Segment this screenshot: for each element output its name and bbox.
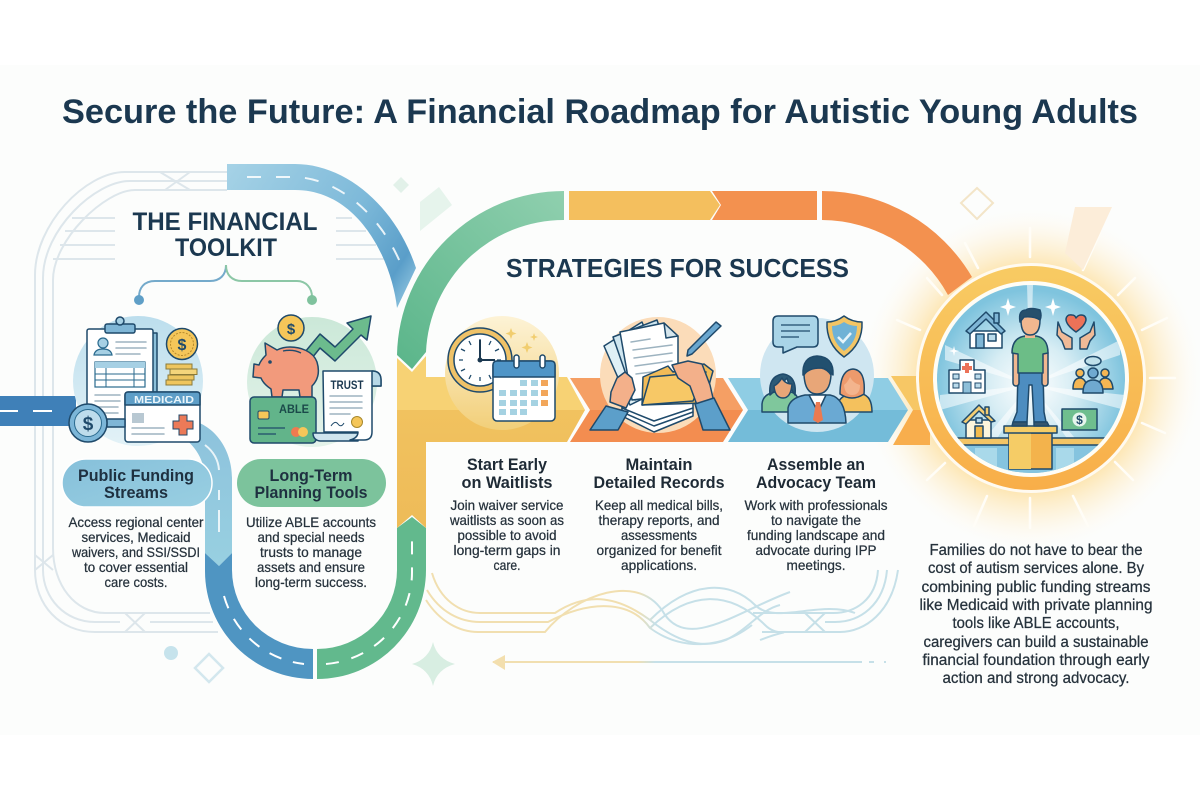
- road: yellow top segment: [569, 191, 720, 220]
- icon: dollar bill: $: [1076, 413, 1083, 427]
- text: public funding streams: to cover essential: [84, 559, 188, 575]
- section heading: the financial toolkit: THE FINANCIAL: [132, 208, 318, 236]
- icon: public funding documents, medicaid card and coins: $: [178, 337, 187, 354]
- icon: piggy bank, ABLE card, trust document, growth arrow: ABLE: [279, 404, 309, 416]
- text: conclusion: cost of autism services alone. By: [928, 560, 1144, 577]
- text: assemble an advocacy team: to navigate the: [771, 512, 861, 528]
- text: start early on waitlists: waitlists as soon as: [449, 512, 564, 528]
- road: light blue descending with arrow: [180, 420, 232, 566]
- sparkles: [949, 298, 1061, 356]
- text: maintain detailed records: therapy reports, and: [598, 512, 720, 528]
- pill: long-term planning tools: [237, 459, 386, 507]
- decorative route lines: woven bottom: [426, 570, 898, 662]
- pill: long-term planning tools: Long-Term: [270, 466, 352, 485]
- text: assemble an advocacy team: [744, 455, 888, 573]
- text: assemble an advocacy team: advocate during IPP: [756, 542, 876, 558]
- road: orange top segment: [712, 191, 817, 220]
- text: conclusion: action and strong advocacy.: [942, 670, 1130, 687]
- icon: community group: [1073, 356, 1113, 393]
- text: conclusion: combining public funding streams: [922, 579, 1151, 596]
- text: start early on waitlists: Start Early: [467, 455, 548, 474]
- text: assemble an advocacy team: Work with professionals: [744, 497, 888, 513]
- pill: public funding streams: Streams: [104, 483, 168, 502]
- pedestal: [1004, 426, 1057, 469]
- text: conclusion: tools like ABLE accounts,: [952, 615, 1120, 632]
- section heading: the financial toolkit: [132, 208, 318, 262]
- text: assemble an advocacy team: Assemble an: [767, 455, 865, 474]
- text: public funding streams: waivers, and SSI/SSDI: [71, 544, 200, 560]
- sun rays: [897, 228, 1175, 528]
- step chevron: orange: [570, 378, 743, 442]
- connector into goal ring: [891, 376, 930, 445]
- text: maintain detailed records: Detailed Records: [594, 473, 724, 492]
- icon: piggy bank, ABLE card, trust document, growth arrow: [247, 315, 381, 447]
- decorative route lines: toolkit frame: [35, 172, 384, 632]
- text: maintain detailed records: Maintain: [626, 455, 692, 474]
- icon: house: [966, 312, 1005, 348]
- pill: public funding streams: Public Funding: [78, 466, 194, 485]
- step chevron: yellow with column: [397, 356, 585, 528]
- text: long-term planning tools: and special needs: [258, 529, 364, 545]
- arrowhead: bottom route: [492, 655, 505, 670]
- bracket connecting toolkit to columns: [134, 265, 317, 305]
- text: start early on waitlists: Join waiver service: [450, 497, 564, 513]
- icon: dollar bill: [1062, 409, 1097, 430]
- road: dark blue U segment: [205, 553, 313, 679]
- text: maintain detailed records: assessments: [621, 527, 697, 543]
- text: start early on waitlists: on Waitlists: [462, 473, 552, 492]
- section heading: the financial toolkit: TOOLKIT: [175, 234, 277, 262]
- text: assemble an advocacy team: meetings.: [786, 557, 846, 573]
- title: Secure the Future: A Financial Roadmap for Autistic Young Adults: [62, 93, 1138, 131]
- road: green arc: [397, 191, 564, 369]
- text: conclusion: caregivers can build a sustainable: [924, 634, 1148, 651]
- text: public funding streams: Access regional center: [68, 514, 204, 530]
- goal ring with person on pedestal: [916, 263, 1146, 493]
- section heading: strategies for success: STRATEGIES FOR SUCCESS: [506, 253, 849, 283]
- text: conclusion: financial foundation through early: [922, 652, 1150, 669]
- icon: medical records and folder with hands: [590, 317, 730, 433]
- icon: public funding documents, medicaid card and coins: $: [83, 414, 94, 435]
- text: start early on waitlists: long-term gaps in: [454, 542, 560, 558]
- icon: clock and calendar: [445, 316, 559, 430]
- icon: piggy bank, ABLE card, trust document, growth arrow: TRUST: [330, 380, 364, 392]
- icon: public funding documents, medicaid card and coins: MEDICAID: [134, 394, 194, 406]
- person standing on pedestal: [1012, 308, 1049, 426]
- text: public funding streams: services, Medicaid: [82, 529, 190, 545]
- text: assemble an advocacy team: Advocacy Team: [756, 473, 876, 492]
- icon: piggy bank, ABLE card, trust document, growth arrow: $: [287, 321, 296, 338]
- road: green U segment with arrow: [317, 517, 426, 679]
- icon: public funding documents, medicaid card and coins: [69, 316, 203, 446]
- road: entry from left: [0, 396, 76, 426]
- text: long-term planning tools: [246, 514, 376, 590]
- road: orange arc into goal: [822, 191, 972, 295]
- text: long-term planning tools: Utilize ABLE accounts: [246, 514, 376, 530]
- text: public funding streams: [68, 514, 204, 590]
- text: long-term planning tools: long-term success.: [255, 574, 367, 590]
- sun glow: [856, 204, 1200, 554]
- text: conclusion: Families do not have to bear the: [930, 542, 1142, 559]
- icon: heart in hands: [1057, 315, 1095, 349]
- text: long-term planning tools: trusts to manage: [260, 544, 362, 560]
- decorative shapes: [164, 177, 1112, 686]
- text: assemble an advocacy team: funding landscape and: [747, 527, 885, 543]
- text: start early on waitlists: [449, 455, 564, 573]
- icon: small house: [962, 405, 995, 438]
- text: conclusion: [920, 542, 1152, 687]
- text: maintain detailed records: organized for benefit: [596, 542, 722, 558]
- text: conclusion: like Medicaid with private planning: [920, 597, 1152, 614]
- text: start early on waitlists: care.: [494, 557, 520, 573]
- text: maintain detailed records: applications.: [621, 557, 697, 573]
- text: public funding streams: care costs.: [104, 574, 168, 590]
- road: upper blue curve: [227, 164, 416, 308]
- text: maintain detailed records: Keep all medical bills,: [595, 497, 723, 513]
- text: maintain detailed records: [594, 455, 724, 573]
- text: long-term planning tools: assets and ensure: [257, 559, 365, 575]
- pill: long-term planning tools: Planning Tools: [254, 483, 368, 502]
- step chevron: blue: [728, 378, 908, 442]
- icon: hospital: [949, 360, 985, 393]
- pill: public funding streams: [62, 459, 212, 507]
- icon: advocacy team with speech bubble and shield: [760, 316, 874, 432]
- text: start early on waitlists: possible to avoid: [458, 527, 556, 543]
